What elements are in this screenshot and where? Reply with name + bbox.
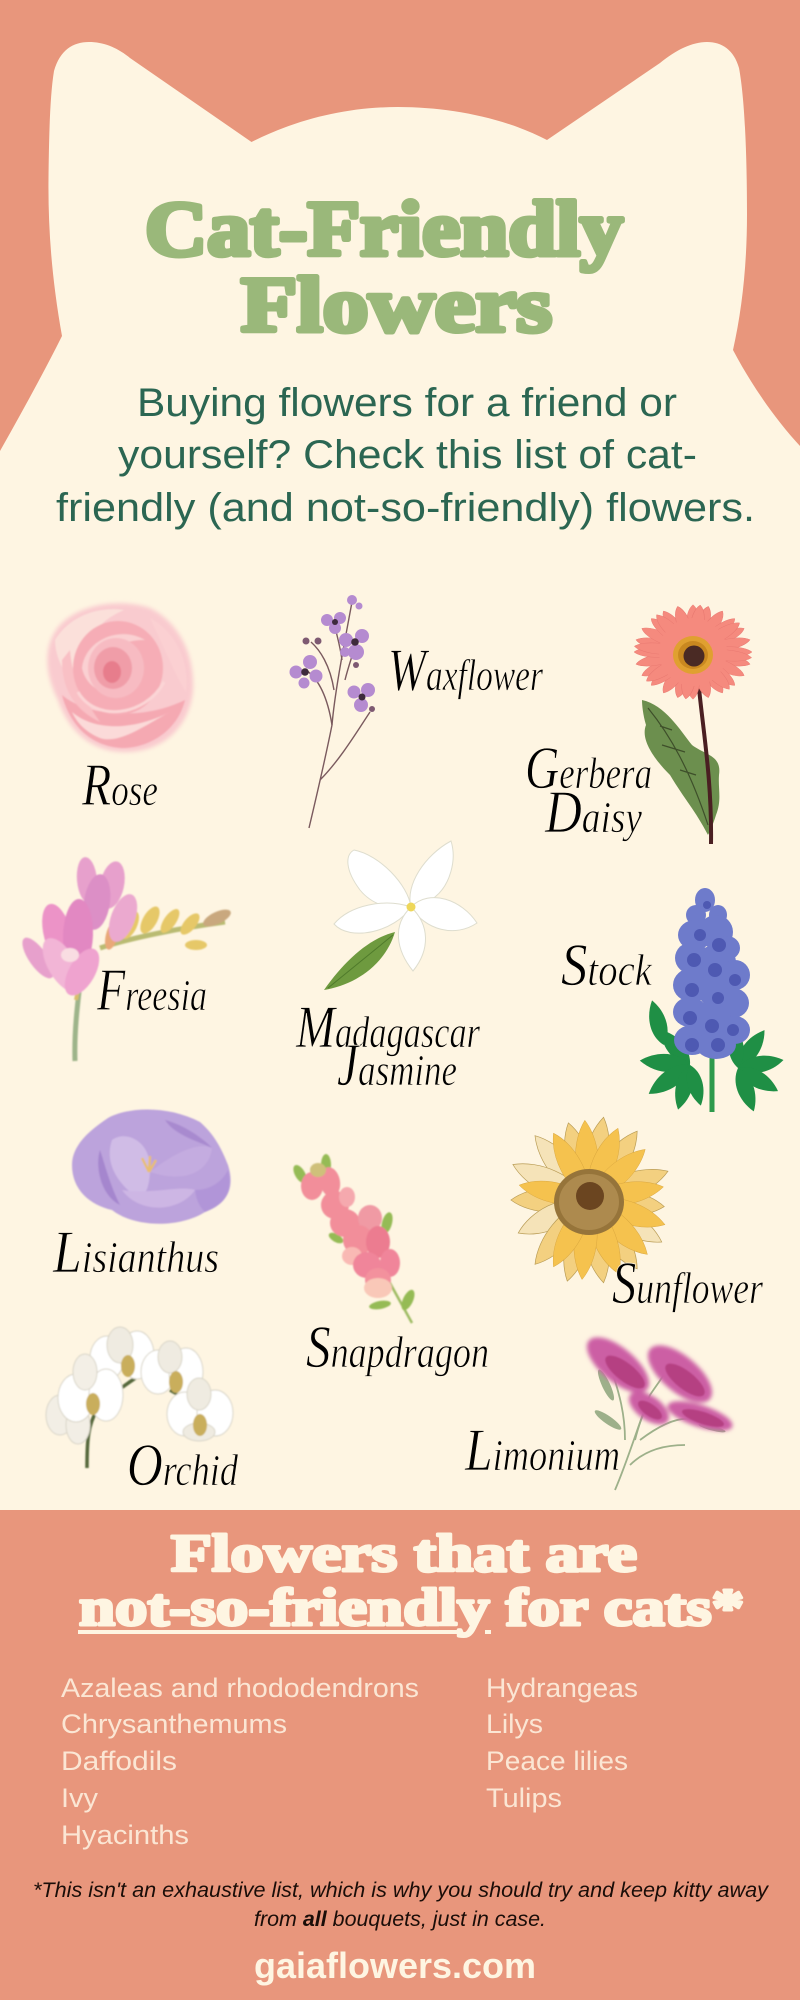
list: left column: Chrysanthemums <box>61 1709 287 1739</box>
icon: snapdragon <box>291 1154 417 1323</box>
list: left column <box>61 1673 419 1850</box>
icon: orchid <box>46 1327 233 1468</box>
icon: sunflower <box>508 1115 672 1285</box>
list: right column: Hydrangeas <box>486 1673 638 1703</box>
list: left column: Hyacinths <box>61 1820 189 1850</box>
list: right column <box>486 1673 638 1813</box>
list: left column: Ivy <box>61 1783 99 1813</box>
title <box>145 185 623 348</box>
label: Limonium: Limonium <box>464 1417 620 1483</box>
list: right column: Lilys <box>486 1709 543 1739</box>
panel: cat silhouette <box>0 42 800 1510</box>
label: Rose: Rose <box>81 752 158 818</box>
list: left column: Azaleas and rhododendrons <box>61 1673 419 1703</box>
heading: not-so-friendly <box>78 1525 744 1637</box>
intro text <box>56 381 755 530</box>
label: Gerbera Daisy: Daisy <box>544 779 642 845</box>
list: left column: Daffodils <box>61 1746 177 1776</box>
label: Snapdragon: Snapdragon <box>306 1314 489 1380</box>
icon: gerbera daisy <box>634 604 752 844</box>
footnote <box>33 1879 770 1931</box>
icon: madagascar jasmine <box>324 841 477 990</box>
label: Freesia: Freesia <box>96 957 207 1023</box>
list: right column: Peace lilies <box>486 1746 628 1776</box>
title: Cat-Friendly <box>145 185 623 272</box>
intro text: yourself? Check this list of cat- <box>118 433 697 477</box>
intro text: Buying flowers for a friend or <box>137 381 677 425</box>
footnote: from all bouquets, just in case. <box>254 1908 546 1931</box>
label: Orchid: Orchid <box>127 1432 239 1498</box>
icon: waxflower <box>290 595 375 828</box>
icon: rose <box>47 603 193 752</box>
label: Gerbera Daisy: Gerbera <box>525 735 652 801</box>
website: gaiaflowers.com <box>254 1945 536 1986</box>
intro text: friendly (and not-so-friendly) flowers. <box>56 486 755 530</box>
icon: lisianthus <box>72 1109 231 1224</box>
icon: stock <box>639 888 785 1114</box>
heading: not-so-friendly: not-so-friendly for cats* <box>79 1579 744 1637</box>
icon: limonium <box>578 1328 736 1490</box>
label: Madagascar Jasmine: Madagascar <box>295 994 481 1060</box>
icon: freesia <box>17 856 233 1061</box>
label: Gerbera Daisy <box>525 735 652 845</box>
footnote: *This isn't an exhaustive list, which is why you should try and keep kitty away <box>33 1879 770 1902</box>
label: Madagascar Jasmine: Jasmine <box>337 1032 457 1098</box>
title: Flowers <box>241 261 552 348</box>
label: Stock: Stock <box>561 932 653 998</box>
label: Lisianthus: Lisianthus <box>52 1219 219 1285</box>
label: Madagascar Jasmine <box>295 994 481 1098</box>
heading: not-so-friendly: Flowers that are <box>171 1525 637 1583</box>
label: Sunflower: Sunflower <box>612 1250 764 1316</box>
list: right column: Tulips <box>486 1783 562 1813</box>
panel: not-so-friendly flowers <box>0 1510 800 2000</box>
label: Waxflower: Waxflower <box>388 637 544 703</box>
